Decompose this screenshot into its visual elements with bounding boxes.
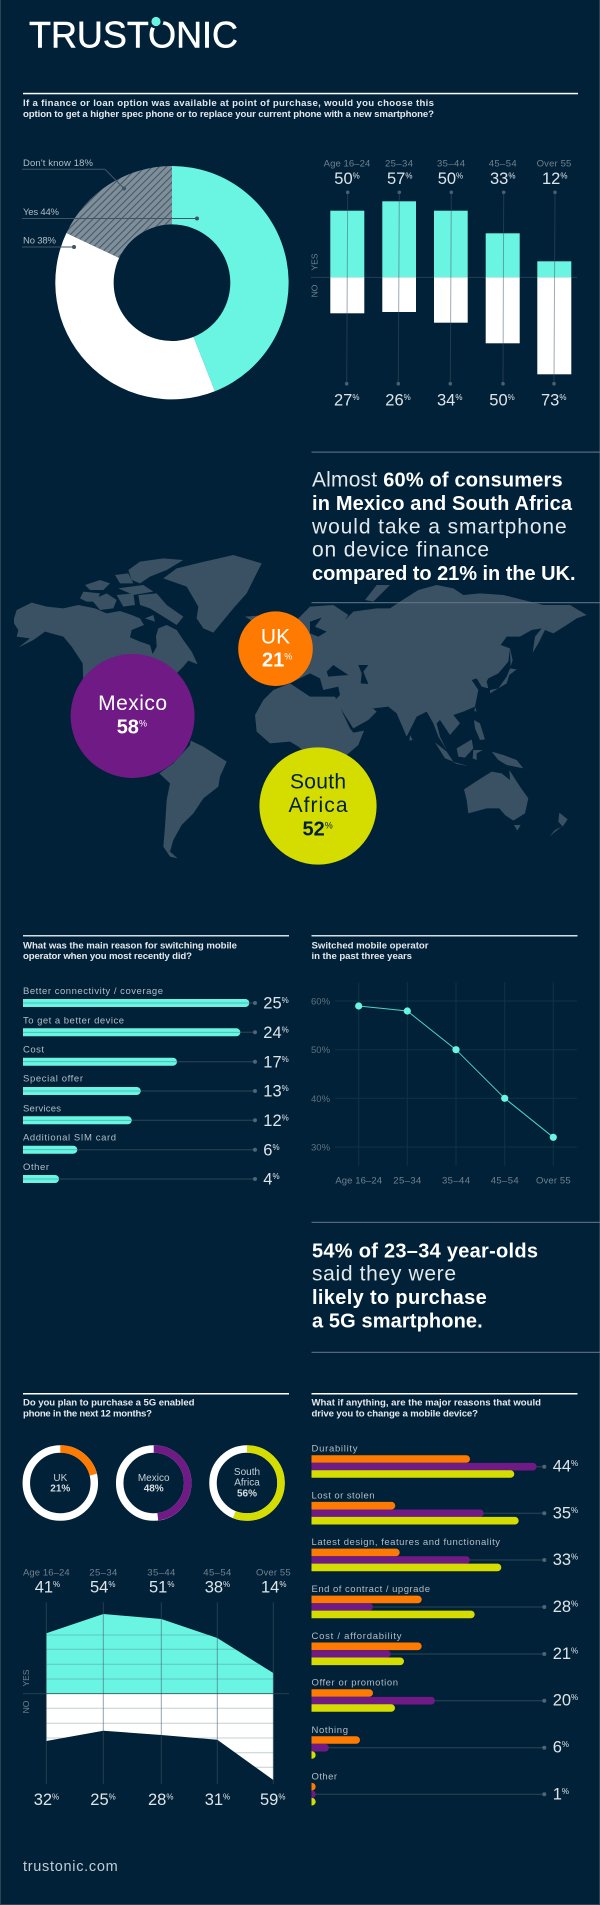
callout: almost 60% of consumers: would take a smartphone [311,515,567,538]
world map [14,555,587,858]
area chart: 5G plans by age: 25–34 [89,1568,117,1579]
bar chart: reasons for switching: Cost [23,1045,44,1056]
callout: 54% of 23–34 year-olds: a 5G smartphone. [312,1310,483,1332]
bars: Latest design, features and functionality: 33 [553,1551,571,1569]
section heading: 5G purchase plans [23,1393,289,1420]
area chart: 5G plans by age: 41 [35,1579,53,1597]
ring chart: UK 21%: 21% [50,1484,70,1495]
bars: Durability [312,1444,578,1478]
ring chart: UK 21% [26,1449,94,1517]
bars: Nothing: 6 [553,1739,562,1757]
bars: Latest design, features and functionality: Latest design, features and functionality [312,1537,500,1548]
bar chart: finance by age: % [456,172,463,180]
bars: Durability: 44 [553,1458,571,1476]
section heading: reasons to change device: drive you to change a mobile device? [312,1409,478,1420]
bar chart: finance by age: % [405,172,412,180]
bar chart: finance by age: 25–34 [385,159,413,170]
area chart: 5G plans by age: % [166,1792,173,1802]
bar chart: reasons for switching: 17 [263,1053,282,1071]
bars: Offer or promotion: 20 [553,1692,571,1710]
section heading: switched operator: Switched mobile operator [312,940,429,951]
bar chart: finance by age: 73 [541,391,559,409]
line chart: switched operator by age: Over 55 [536,1175,571,1186]
ring chart: South Africa 56%: South [234,1467,260,1478]
bar chart: finance by age: % [508,172,515,180]
area chart: 5G plans by age: % [223,1792,230,1802]
section heading: 5G purchase plans: phone in the next 12 months? [23,1409,152,1420]
callout: almost 60% of consumers: in Mexico and South Africa [312,493,573,515]
bars: Other [312,1772,569,1806]
bubble: UK 21% [238,611,313,686]
bars: Cost / affordability: 21 [553,1645,571,1663]
area chart: 5G plans by age: 35–44 [147,1568,175,1579]
area chart: 5G plans by age: 31 [205,1791,223,1809]
bar chart: reasons for switching: % [282,1055,289,1064]
bar chart: finance by age: 50 [438,170,456,188]
bar chart: reasons for switching: Other [23,1162,49,1173]
bar chart: reasons for switching: % [282,996,289,1005]
callout: no 38%: No 38% [23,236,57,247]
bar chart: reasons for switching: % [282,1114,289,1122]
bars: Cost / affordability [312,1631,578,1665]
callout: don't know 18% [22,158,126,190]
logo: Trustonic: TRUSTONIC [29,14,238,56]
line chart: switched operator by age: 45–54 [491,1175,519,1186]
bar chart: finance by age: 26 [385,391,404,409]
bars: Lost or stolen: Lost or stolen [312,1490,374,1501]
bars: Other: 1 [553,1785,562,1803]
bubble: UK 21%: 21 [262,650,284,672]
bubble: Mexico 58%: Mexico [98,692,167,715]
bars: Durability: % [571,1459,578,1468]
bubble: South Africa 52% [259,747,377,865]
line chart: switched operator by age: Age 16–24 [335,1175,382,1186]
line chart: switched operator by age: 25–34 [393,1175,421,1186]
area chart: 5G plans by age: % [278,1792,285,1802]
callout: almost 60% of consumers: Almost 60% of consumers [312,469,563,492]
section heading: finance question [23,93,578,120]
bar chart: reasons for switching: 24 [263,1024,282,1042]
bars: Latest design, features and functionality: % [571,1552,578,1562]
bubble: South Africa 52%: South [290,771,346,794]
area chart: 5G plans by age: 51 [149,1579,167,1597]
bar chart: finance by age: 34 [437,391,455,409]
bubble: South Africa 52%: % [325,820,333,830]
map: Europe, Africa, Asia and Oceania [255,585,587,837]
bar chart: finance by age: YES [310,253,320,271]
bar chart: finance by age: % [353,172,360,180]
area chart: 5G plans by age: % [52,1792,59,1802]
bubble: UK 21%: UK [261,625,290,648]
bar chart: reasons for switching: Additional SIM card [23,1132,116,1143]
area chart: 5G plans by age: % [167,1580,174,1589]
ring chart: South Africa 56%: 56% [237,1488,257,1499]
donut chart: yes, no, don't know [22,158,289,399]
callout: yes 44%: Yes 44% [23,207,60,218]
map: Americas and Greenland [14,555,262,858]
area chart: 5G plans by age: 45–54 [203,1568,231,1579]
bar chart: finance by age: Over 55 [537,159,571,170]
bar chart: reasons for switching: % [272,1143,280,1152]
callout: almost 60% of consumers: compared to 21% in the UK. [312,563,576,585]
bubble: South Africa 52%: Africa [288,794,348,817]
area chart: 5G plans by age: NO [21,1700,31,1713]
bar chart: reasons for switching: Special offer [23,1074,83,1085]
bar chart: finance by age: 50 [334,170,353,188]
bars: Nothing: Nothing [312,1725,348,1736]
footer: website: trustonic.com [23,1859,118,1875]
bar chart: reasons for switching: Better connectivity / coverage [23,986,163,997]
area chart: 5G plans by age: % [108,1580,115,1589]
bar chart: reasons for switching: 12 [263,1112,282,1130]
callout: almost 60% of consumers [311,452,600,603]
area chart: 5G plans by age: Age 16–24 [23,1568,70,1579]
bars: Cost / affordability: % [571,1646,578,1656]
bars: Lost or stolen [312,1490,578,1524]
area chart: 5G plans by age: % [53,1580,60,1589]
callout: don't know 18%: Don't know 18% [23,158,94,169]
callout: no 38% [22,236,76,249]
section heading: 5G purchase plans: Do you plan to purchase a 5G enabled [23,1398,195,1409]
section heading: switched operator [312,935,578,962]
line chart: switched operator by age: 30% [311,1142,331,1154]
bar chart: finance by age: 45–54 [489,159,517,170]
area chart: 5G plans by age: Over 55 [256,1568,291,1579]
bar chart: reasons for switching: % [282,1084,289,1093]
section heading: finance question: option to get a higher spec phone or to replace your current phone with a new smartphone? [23,109,434,120]
callout: 54% of 23–34 year-olds [312,1222,600,1353]
area chart: 5G plans by age: % [279,1580,286,1589]
bar chart: finance by age: 35–44 [437,159,465,170]
bar chart: reasons for switching: 13 [263,1083,282,1101]
bar chart: reasons for switching: 25 [263,995,282,1013]
ring chart: South Africa 56%: Africa [234,1478,260,1489]
callout: yes 44% [22,207,199,220]
section heading: reasons to change device [312,1393,578,1420]
callout: 54% of 23–34 year-olds: likely to purchase [312,1287,487,1309]
bar chart: reasons for switching: To get a better device [23,1015,124,1026]
section heading: switching reason [23,935,289,962]
area chart: 5G plans by age: % [223,1580,230,1589]
bar chart: finance by age: 33 [490,170,508,188]
line chart: switched operator by age [311,982,577,1186]
bar chart: finance by age: % [508,393,515,402]
bar chart: finance by age: % [455,393,462,402]
bars: Offer or promotion [312,1678,578,1712]
bars: End of contract / upgrade: End of contract / upgrade [312,1584,430,1595]
bubble: Mexico 58% [71,654,195,778]
bars: End of contract / upgrade: % [571,1600,578,1608]
area chart: 5G plans by age: 25 [90,1791,109,1809]
bar chart: reasons for switching: 4 [263,1171,272,1189]
bar chart: reasons for switching: Services [23,1103,61,1114]
bar chart: finance by age: % [404,393,411,402]
area chart: 5G plans by age: 59 [260,1791,278,1809]
bars: Lost or stolen: % [571,1506,578,1515]
area chart: 5G plans by age: 28 [148,1791,166,1809]
bubble: Mexico 58%: 58 [117,716,139,738]
bar chart: reasons for switching: % [272,1172,280,1181]
section heading: switching reason: operator when you most recently did? [23,951,192,962]
bar chart: finance by age: Age 16–24 [324,159,370,170]
section heading: switched operator: in the past three years [312,951,412,962]
bars: End of contract / upgrade: 28 [553,1598,571,1616]
bar chart: reasons for switching: 6 [263,1141,272,1159]
bars: Nothing: % [562,1740,569,1749]
bar chart: reasons for switching [23,986,289,1189]
bars: End of contract / upgrade [312,1584,578,1618]
bar chart: reasons for switching: % [282,1026,289,1034]
bar chart: finance by age: 27 [334,391,352,409]
area chart: 5G plans by age: 38 [205,1579,223,1597]
callout: 54% of 23–34 year-olds: said they were [312,1263,456,1286]
section heading: switching reason: What was the main reason for switching mobile [23,940,237,951]
ring chart: Mexico 48%: 48% [144,1484,164,1495]
bars: Other: % [562,1787,569,1796]
bubble: UK 21%: % [284,652,292,662]
area chart: 5G plans by age: 32 [34,1791,52,1809]
bubble: South Africa 52%: 52 [302,818,325,840]
bars: Latest design, features and functionality [312,1537,578,1571]
ring chart: UK 21%: UK [53,1473,68,1484]
ring chart: Mexico 48%: Mexico [138,1473,170,1484]
bars: Durability: Durability [312,1444,358,1455]
ring chart: Mexico 48% [120,1449,188,1517]
line chart: switched operator by age: 40% [311,1094,331,1105]
bar chart: finance by age [310,159,577,409]
line chart: switched operator by age: 35–44 [442,1175,470,1186]
bar chart: finance by age: % [352,393,359,402]
area chart: 5G plans by age: % [109,1792,116,1802]
bar chart: finance by age: 57 [387,170,405,188]
bars: Offer or promotion: % [571,1693,578,1702]
bar chart: finance by age: 50 [489,391,508,409]
area chart: 5G plans by age: 14 [261,1579,279,1597]
bar chart: finance by age: % [559,393,566,402]
bubble: Mexico 58%: % [139,718,147,728]
section heading: finance question: If a finance or loan option was available at point of purchase, would you choose this [23,98,434,109]
bars: Other: Other [312,1772,337,1783]
area chart: 5G plans by age: YES [21,1669,31,1687]
area chart: 5G plans by age: 54 [90,1579,108,1597]
section heading: reasons to change device: What if anything, are the major reasons that would [312,1398,541,1409]
callout: almost 60% of consumers: on device finance [312,539,489,562]
bar chart: finance by age: NO [310,284,320,297]
bar chart: finance by age: 12 [542,170,560,188]
bars: Lost or stolen: 35 [553,1504,571,1522]
callout: 54% of 23–34 year-olds: 54% of 23–34 year-olds [312,1240,538,1262]
bars: Offer or promotion: Offer or promotion [312,1678,398,1689]
line chart: switched operator by age: 50% [311,1045,331,1056]
bar chart: finance by age: % [560,172,567,180]
grouped bar chart: reasons to change device [312,1444,578,1806]
bars: Cost / affordability: Cost / affordability [312,1631,402,1642]
bars: Nothing [312,1725,569,1759]
area chart: 5G plans by age [21,1568,291,1809]
ring chart: South Africa 56% [213,1449,281,1517]
line chart: switched operator by age: 60% [311,996,331,1008]
